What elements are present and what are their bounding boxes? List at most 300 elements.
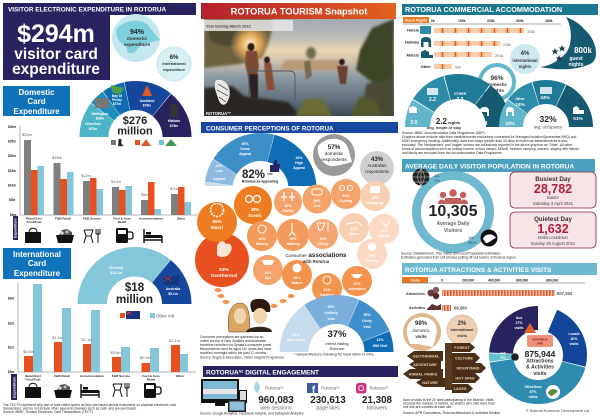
illustration: signpost: HOT SPAS	[455, 376, 475, 380]
callout: 6% international expenditure: expenditure	[163, 67, 186, 72]
text block: accommodation source: and family are excluded from the Accommodation Data Programme.	[402, 151, 503, 155]
icons: international categories	[25, 383, 161, 398]
chart: intention to visit semi-donut: Likely	[362, 319, 372, 323]
bubbles: light associations: Fishing	[366, 259, 378, 263]
text block: attractions note: one site are counted at each site.	[403, 405, 452, 409]
text block: consumer perceptions note: online survey of New Zealand and Australian	[200, 339, 266, 343]
labels: donut segments: 30%	[570, 337, 578, 341]
chart: average occupancy: 34%	[540, 95, 551, 101]
callout: 94% domestic expenditure: 94%	[130, 29, 145, 36]
bubbles: medium associations: 40%	[258, 237, 266, 241]
chart: intention to visit semi-donut: Won't visit	[287, 338, 306, 342]
stat: 875,944 visits: & Activities	[526, 364, 554, 370]
labels: donut segments: Locals	[568, 332, 580, 336]
illustration: signpost: ADVENTURE	[413, 363, 437, 367]
callout: $294m visitor card expenditure	[3, 15, 110, 80]
bubbles: medium associations: Walking	[286, 242, 300, 246]
callout: 94% domestic expenditure	[112, 14, 160, 62]
callout: 4% international nights: nights	[519, 64, 532, 69]
illustration: signpost: GEOTHERMAL	[412, 354, 440, 358]
heading: visitor electronic expenditure: VISITOR ELECTRONIC EXPENDITURE IN ROTORUA	[8, 6, 167, 14]
heading: attractions and activities	[402, 263, 597, 275]
moon: 800k guest nights: guest	[569, 56, 583, 62]
heading: digital engagement: NZ	[239, 370, 244, 374]
chart: appeal semi-donut: 40%	[241, 142, 249, 146]
label: year ending March 2022: Year Ending March 2022	[206, 24, 252, 28]
callout: 6% international expenditure	[157, 47, 191, 81]
icon: kiwi domestic 10k: 10k	[468, 235, 474, 240]
source: digital: Source: Google Analytics, Facebook Insights, and Instagram Analytics	[200, 412, 304, 416]
heading: consumer perceptions: CONSUMER PERCEPTIONS OF ROTORUA	[206, 126, 334, 132]
label: consumer associations	[285, 252, 347, 264]
label: 37% intend visiting	[325, 329, 349, 351]
label: 82% rate Rotorua as appealing: 82%	[242, 169, 265, 181]
badge: rotorua sign: ONE	[537, 342, 543, 346]
chart: appeal semi-donut: Low	[216, 169, 223, 173]
chart: guest nights by type: 201k	[495, 54, 503, 58]
bar chart: domestic card expenditure: $20m	[8, 154, 16, 158]
callout: 6% international expenditure: 6%	[170, 55, 179, 61]
panel: busiest day: 28,782	[534, 182, 572, 196]
chart: average occupancy: Other	[515, 97, 525, 101]
chart: average occupancy	[505, 87, 584, 127]
stat: web sessions: 960,083	[258, 395, 294, 406]
panel: quietest day	[510, 212, 596, 248]
bar chart: international card expenditure: $3m	[8, 296, 15, 300]
chart: domestic expenditure by region: $26m	[96, 116, 104, 120]
bar chart: international card expenditure: $0.6m	[23, 349, 35, 354]
bar chart: international card expenditure: $0m	[8, 370, 15, 374]
panel: busiest day: Saturday 3 April 2021	[533, 201, 574, 206]
chart: visits bars: 600,000	[516, 278, 528, 282]
label: expenditure axis domestic	[13, 216, 18, 240]
label: expenditure axis international	[11, 374, 17, 400]
chart: intention to visit semi-donut: Will Visit	[373, 344, 388, 348]
bar chart: international card expenditure: F&B Service	[112, 374, 130, 378]
text block: accommodation source: MOD emergency housing. Additionally, data from stays greater than 30 days at motel use establishments is also	[402, 139, 568, 143]
panel: quietest day: Delta Lockdown	[538, 235, 569, 240]
bar chart: domestic card expenditure: Accommodation	[139, 216, 163, 220]
bar chart: domestic card expenditure: $5m	[141, 192, 149, 197]
chart: guest nights by type: 400k	[545, 19, 553, 23]
stat: followers: Rotorua	[370, 386, 385, 390]
bar chart: international card expenditure: Other	[176, 374, 185, 378]
heading: daily visitor population	[402, 159, 595, 172]
chart: domestic expenditure by region: Bay of	[112, 94, 123, 98]
bar chart: domestic card expenditure: $10m	[111, 179, 122, 184]
chart: average occupancy: 51%	[573, 116, 584, 122]
stat: 10,305 average daily visitors: Average Daily	[437, 221, 470, 227]
bubble: Scenic: 48%	[251, 207, 259, 212]
moon: 800k guest nights: 800k	[574, 46, 592, 55]
chart: visitor donut	[416, 176, 490, 248]
label: consumer associations: Consumer associations	[285, 252, 347, 259]
chart: domestic expenditure by region: Plenty	[112, 98, 122, 102]
chart: appeal semi-donut: High	[295, 161, 303, 165]
bubbles: medium associations: Spa	[265, 276, 271, 280]
icon: globe international 111	[412, 168, 440, 186]
label: 32% occupancy	[534, 114, 563, 130]
heading: commercial accommodation: ROTORUA COMMERCIAL ACCOMMODATION	[405, 5, 562, 14]
chart: visits bars: 200,000	[462, 278, 474, 282]
label: 2.2 nights	[427, 117, 462, 130]
title: Rotorua Tourism Snapshot: ROTORUA TOURISM Snapshot	[231, 6, 367, 16]
label: 2.2 nights: avg. length of stay	[427, 125, 462, 130]
callout: 98% domestic visits: 98%	[415, 321, 428, 327]
callout: 57% domestic respondents: 57%	[328, 144, 341, 151]
moon: 800k guest nights	[540, 17, 596, 69]
chart: average occupancy: 24%	[515, 102, 526, 108]
text block: attractions note: exceeds the number of visitors, as visitors who visit more than	[403, 402, 495, 406]
chart: guest nights by type: 200k	[487, 19, 495, 23]
chart: average length of stay: 2.4	[481, 121, 488, 127]
bubbles: light associations: Shopping	[367, 201, 383, 205]
bubbles: medium associations: Nature	[291, 281, 303, 285]
bubbles: light associations: 16%	[380, 229, 388, 233]
bubbles: light associations: Water	[349, 232, 359, 236]
legend: international: Other Intl	[156, 314, 174, 318]
bubble: Scenic: Scenic	[248, 213, 262, 218]
text block: TECTS note	[3, 403, 176, 414]
labels: donut segments: 2%	[500, 356, 506, 360]
bubbles: medium associations: 34%	[342, 194, 350, 198]
callout: 98% domestic visits: domestic	[412, 328, 431, 333]
chart: appeal semi-donut: Appeal	[213, 177, 225, 181]
chart: international expenditure by origin	[92, 262, 180, 304]
chart: guest nights by type: 300k	[516, 19, 524, 23]
bar chart: international card expenditure: $2m	[8, 322, 15, 326]
stat: page likes: Rotorua	[321, 386, 336, 390]
text block: accommodation source: Graphics above exclude data from establishments exclusively contracted for Managed Isolation/Quarantine (MIQ) and	[402, 135, 576, 139]
stat: followers: followers	[367, 406, 388, 412]
panel: quietest day: Sunday 29 August 2021	[531, 241, 576, 246]
callout: 4% international nights: international	[512, 58, 538, 63]
chart: domestic expenditure by region: $57m	[89, 127, 97, 131]
source: population	[401, 252, 517, 260]
callout: 57% domestic respondents: domestic	[325, 151, 344, 156]
chart: guest nights by type: Guest Nights	[405, 18, 427, 22]
chart: intention to visit semi-donut	[287, 305, 388, 352]
text block: TECTS note: Source: MBIE, Tourism Electronic Card Transactions (TECT)	[3, 410, 93, 414]
text block: TECTS note: transactions, and do not include other payment channels such as cash and pre-purchases.	[3, 406, 137, 410]
badge: rotorua sign: ROTORUA	[532, 338, 548, 342]
bar chart: international card expenditure: Accommodation	[80, 374, 104, 378]
source: population: Source: DataVentures, TNZ Visitor and Local Population Estimates.	[401, 252, 501, 256]
illustration: signpost: NATURE	[422, 381, 438, 385]
labels: donut segments: visits	[515, 326, 524, 330]
stat: web sessions	[254, 381, 294, 412]
bubbles: medium associations: Dining	[318, 242, 328, 246]
copyright: © Rotorua Economic Development Ltd.	[526, 409, 590, 413]
icon: kiwi domestic 10k	[468, 230, 498, 246]
heading: consumer perceptions	[201, 122, 398, 133]
label: year ending March 2022	[204, 20, 293, 31]
chart: guest nights by type: 228k	[503, 43, 511, 47]
label: $276 million: $276	[123, 115, 147, 127]
chart: domestic expenditure by region: Auckland	[140, 99, 154, 103]
bar chart: domestic card expenditure: $26m	[22, 132, 33, 137]
stat: web sessions: Rotorua	[265, 386, 280, 390]
bar chart: domestic card expenditure: Retail Excl	[26, 216, 42, 220]
bar chart: domestic card expenditure: $12m	[81, 173, 92, 178]
badge: rotorua sign	[527, 335, 553, 347]
bubble: Maori: Maori	[211, 225, 223, 230]
bar chart: domestic card expenditure: Other	[177, 216, 186, 220]
stat: page likes: page likes	[316, 406, 340, 412]
chart: guest nights by type: Holiday	[405, 40, 420, 44]
chart: average length of stay: 2.3	[457, 97, 464, 103]
bar chart: international card expenditure: F&B Retail	[54, 374, 70, 378]
bubbles: medium associations: Adventure	[348, 287, 366, 291]
heading: domestic card expenditure: Domestic	[18, 88, 55, 97]
callout: $294m visitor card expenditure: visitor card	[14, 46, 98, 63]
text block: accommodation source: Source: MBIE, Accommodation Data Programme (ADP)	[402, 131, 485, 135]
heading: digital engagement	[203, 366, 398, 377]
chart: domestic expenditure by region	[85, 85, 180, 137]
bubble: Geothermal: Geothermal	[211, 273, 237, 279]
stat: 875,944 visits: Attractions	[526, 358, 554, 364]
heading: domestic card expenditure: Expenditure	[13, 107, 60, 116]
heading: international card expenditure	[3, 248, 71, 279]
stat: 875,944 visits: 875,944	[525, 349, 556, 359]
panel: quietest day: Quietest Day	[534, 216, 572, 223]
stat: page likes: 230,613	[310, 395, 346, 406]
label: 82% rate Rotorua as appealing: Rotorua as appealing	[242, 180, 278, 184]
labels: donut segments: Aus	[516, 316, 522, 320]
chart: guest nights by type: 63k	[455, 66, 461, 70]
bar chart: international card expenditure: $0.4m	[140, 355, 152, 360]
text block: consumer perceptions note: Consumer perceptions are gathered via an	[200, 335, 264, 339]
chart: visits bars: 807,384	[557, 291, 573, 296]
bubbles: medium associations: 41%	[264, 271, 272, 275]
label: $18 million	[116, 282, 153, 306]
callout: 4% international nights: 4%	[521, 51, 530, 57]
heading: daily visitor population: AVERAGE DAILY VISITOR POPULATION IN ROTORUA	[405, 164, 574, 170]
label: $276 million: million	[117, 126, 153, 138]
callout: 4% international nights	[510, 44, 540, 74]
stat: 10,305 average daily visitors: Visitors	[444, 228, 462, 234]
icons: domestic categories	[25, 228, 162, 243]
chart: intention to visit semi-donut: Unlikely	[324, 311, 338, 315]
panel: quietest day: 1,632	[537, 222, 569, 236]
bar chart: domestic card expenditure	[8, 125, 198, 224]
text block: consumer perceptions note: travelled overnight within the past 12 months.	[200, 351, 267, 355]
bar chart: domestic card expenditure: $10m	[8, 184, 16, 188]
chart: intention to visit semi-donut: Visit	[363, 325, 371, 329]
stat: followers: 21,308	[362, 395, 393, 406]
chart: guest nights by type: Other	[421, 64, 431, 69]
chart: visits bars: 800,000	[546, 278, 558, 282]
illustration: two faces	[228, 299, 272, 332]
label: 37% intend visiting: Rotorua*	[330, 347, 345, 351]
chart: domestic expenditure by region: Wellington	[92, 112, 108, 116]
chart: visits bars: 400,000	[488, 278, 500, 282]
bubbles: light associations: 9%	[369, 254, 375, 258]
bar chart: international card expenditure: $1m	[8, 346, 15, 350]
chart: appeal semi-donut: 14%	[215, 164, 223, 168]
panel: busiest day: Busiest Day	[535, 176, 571, 183]
chart: domestic expenditure by region: OtherDom	[85, 122, 101, 126]
chart: intention to visit semi-donut: 29%	[327, 305, 335, 309]
callout: 96% domestic nights	[480, 65, 514, 99]
bar chart: international card expenditure: Food/Fuel	[26, 378, 41, 382]
bar chart: international card expenditure: Retail	[147, 378, 155, 382]
bar chart: domestic card expenditure: $15m	[8, 169, 16, 173]
chart: guest nights by type: 100k	[458, 19, 466, 23]
illustration: signpost: LAKES	[454, 387, 467, 391]
bubbles: medium associations: Family	[282, 209, 294, 213]
bubbles: light associations: 19%	[350, 227, 358, 231]
bar chart: domestic card expenditure: $25m	[8, 140, 16, 144]
bar chart: international card expenditure: $0.6m	[110, 350, 122, 355]
bubble: Geothermal	[195, 233, 249, 287]
bubbles: light associations: Events	[378, 234, 390, 238]
icon: kiwi domestic 10k: 99%	[468, 240, 476, 245]
callout: $294m visitor card expenditure: $294m	[17, 20, 95, 48]
thought bubbles	[214, 288, 294, 308]
chart: intention to visit semi-donut: 12%	[376, 338, 384, 342]
callout: 57% domestic respondents	[313, 134, 355, 176]
stat: web sessions: NZ	[280, 386, 284, 390]
chart: domestic expenditure by region: $37m	[113, 102, 121, 106]
text block: consumer perceptions note: travellers recruited via Dynata's consumer panel.	[200, 343, 272, 347]
illustration: signpost	[403, 343, 486, 393]
heading: domestic card expenditure	[3, 86, 70, 116]
chart: international expenditure by origin: $5.1m	[168, 292, 178, 296]
heading: commercial accommodation	[402, 4, 598, 15]
text block: consumer perceptions note	[200, 335, 284, 360]
chart: average length of stay: 2.0	[411, 120, 418, 126]
heading: international card expenditure: International	[13, 250, 61, 259]
chart: international expenditure by origin: OtherIntl	[109, 266, 123, 270]
source: population: Estimates generated from cell phones polling off cell towers in Rotorua region.	[401, 256, 517, 260]
text block: consumer perceptions note: Respondents must be aged 18+ years and have	[200, 347, 271, 351]
bubbles: medium associations: 34%	[293, 276, 301, 280]
bubbles: medium associations: 31%	[323, 288, 331, 292]
chart: guest nights by type: 308k	[527, 30, 535, 34]
stat: page likes: f	[312, 385, 316, 396]
heading: attractions and activities: ROTORUA ATTRACTIONS & ACTIVITIES VISITS	[405, 267, 552, 274]
labels: donut segments: Intl	[500, 352, 506, 356]
labels: donut segments	[500, 316, 580, 399]
bar chart: domestic card expenditure: F&B Retail	[55, 216, 71, 220]
bar chart: domestic card expenditure: $30m	[8, 125, 16, 129]
stat: 10,305 average daily visitors: 10,305	[429, 203, 478, 220]
illustration: signpost: CULTURE	[455, 356, 473, 360]
label: 37% intend visiting: intend visiting	[325, 342, 349, 346]
illustration: signpost: ANIMAL PARKS	[409, 372, 438, 376]
bubbles: medium associations: Gardens	[320, 293, 334, 297]
chart: domestic expenditure by region: $78m	[143, 104, 151, 108]
photo: hot pool scene	[204, 19, 394, 116]
label: $276 million	[117, 115, 153, 138]
callout: 57% domestic respondents: respondents	[321, 157, 347, 162]
callout: 2% international visits: international	[451, 328, 473, 332]
bubble: Maori	[197, 202, 237, 242]
callout: 96% domestic nights: domestic	[487, 82, 508, 87]
callout: 98% domestic visits: visits	[415, 334, 427, 339]
stat: page likes	[307, 383, 346, 412]
legend: domestic regions	[111, 139, 177, 146]
label: consumer associations: with Rotorua	[302, 259, 330, 264]
chart: appeal semi-donut: Appeal	[239, 152, 251, 156]
label: 32% occupancy: 32%	[539, 114, 557, 124]
chart: visits bars: 68,560	[454, 306, 467, 310]
bar chart: domestic card expenditure: Fuel & Auto	[113, 216, 131, 220]
stat: web sessions: web sessions	[260, 406, 292, 412]
bar chart: domestic card expenditure: $0m	[10, 213, 17, 217]
text block: attractions note	[403, 398, 501, 415]
labels: donut segments: OtherDom	[524, 385, 542, 389]
stat: 875,944 visits: visits	[533, 371, 547, 377]
chart: appeal semi-donut: 42%	[295, 156, 303, 160]
callout: 2% international visits: 2%	[458, 321, 467, 327]
heading: international card expenditure: Card	[28, 259, 46, 268]
panel: busiest day: Easter	[547, 195, 560, 200]
heading: digital engagement: ROTORUA	[206, 370, 239, 376]
bubbles: medium associations: 29%	[319, 237, 327, 241]
heading: international card expenditure: Expenditure	[14, 269, 61, 278]
labels: donut segments: 27%	[515, 321, 523, 325]
chart: average length of stay: OTHER	[454, 92, 467, 96]
chart: appeal semi-donut	[213, 142, 305, 189]
label: 2.2 nights: 2.2 nights	[436, 117, 461, 126]
callout: 43% Australian respondents: respondents	[365, 169, 389, 174]
bubbles: medium associations: 30%	[284, 204, 292, 208]
bubbles: medium associations: 39%	[313, 199, 321, 203]
photo: hot pool scene: ROTORUA™	[206, 111, 231, 116]
bubbles: medium associations	[247, 179, 372, 303]
chart: visits bars: Activities	[409, 306, 425, 310]
labels: donut segments: visits	[570, 342, 579, 346]
text block: attractions note: Sum of visits to the 20 sites participating in the Monitor. Visits	[403, 398, 494, 402]
chart: guest nights by type: 0k	[431, 19, 435, 23]
label: $18 million: $18	[125, 282, 145, 294]
text block: attractions note: Source: APR Consultants, Rotorua Attractions & Activities Monitor	[403, 411, 501, 415]
bubble: Maori: 55%	[212, 219, 222, 224]
text block: accommodation source: forms of accommodation such as holiday homes, school camps, AirBnB, freedom camping, maraes, staying with friends	[402, 147, 579, 151]
bar chart: domestic card expenditure: F&B Service	[83, 216, 101, 220]
chart: appeal semi-donut: Appeal	[293, 166, 305, 170]
callout: 2% international visits: visits	[457, 334, 467, 338]
chart: domestic expenditure by region: $78m	[170, 124, 178, 128]
chart: intention to visit semi-donut: 17%	[292, 333, 300, 337]
chart: visits bars: 0	[441, 278, 443, 282]
chart: guest nights by type: Hotels	[407, 28, 419, 32]
bar chart: international card expenditure: $1.2m	[52, 335, 64, 340]
stat: 10,305 average daily visitors	[429, 203, 478, 234]
moon: 800k guest nights: nights	[568, 62, 584, 68]
bar chart: international card expenditure: $1.1m	[82, 337, 93, 342]
chart: average occupancy: 33%	[505, 121, 516, 127]
chart: visits bars: Attractions	[406, 292, 425, 296]
bar chart: domestic card expenditure: Food/Fuel	[27, 220, 42, 224]
bubble: Geothermal: 63%	[219, 267, 230, 273]
bar chart: international card expenditure: Retail Excl	[25, 374, 41, 378]
label: expenditure axis domestic: Expenditure	[14, 218, 18, 238]
callout: 6% international expenditure: international	[162, 61, 186, 66]
bubbles: medium associations: History	[256, 242, 268, 246]
chart: appeal semi-donut: Some	[240, 147, 250, 151]
label: $18 million: million	[116, 294, 153, 306]
bubbles: medium associations: Arts	[313, 204, 321, 208]
chart: intention to visit semi-donut: 25%	[363, 313, 371, 317]
chart: international expenditure by origin: $13.1m	[110, 271, 122, 275]
labels: donut segments: visits	[529, 395, 538, 399]
chart: intention to visit semi-donut: Visit	[327, 317, 335, 321]
callout: 2% international visits	[447, 315, 477, 345]
heading: domestic card expenditure: Card	[27, 97, 46, 106]
